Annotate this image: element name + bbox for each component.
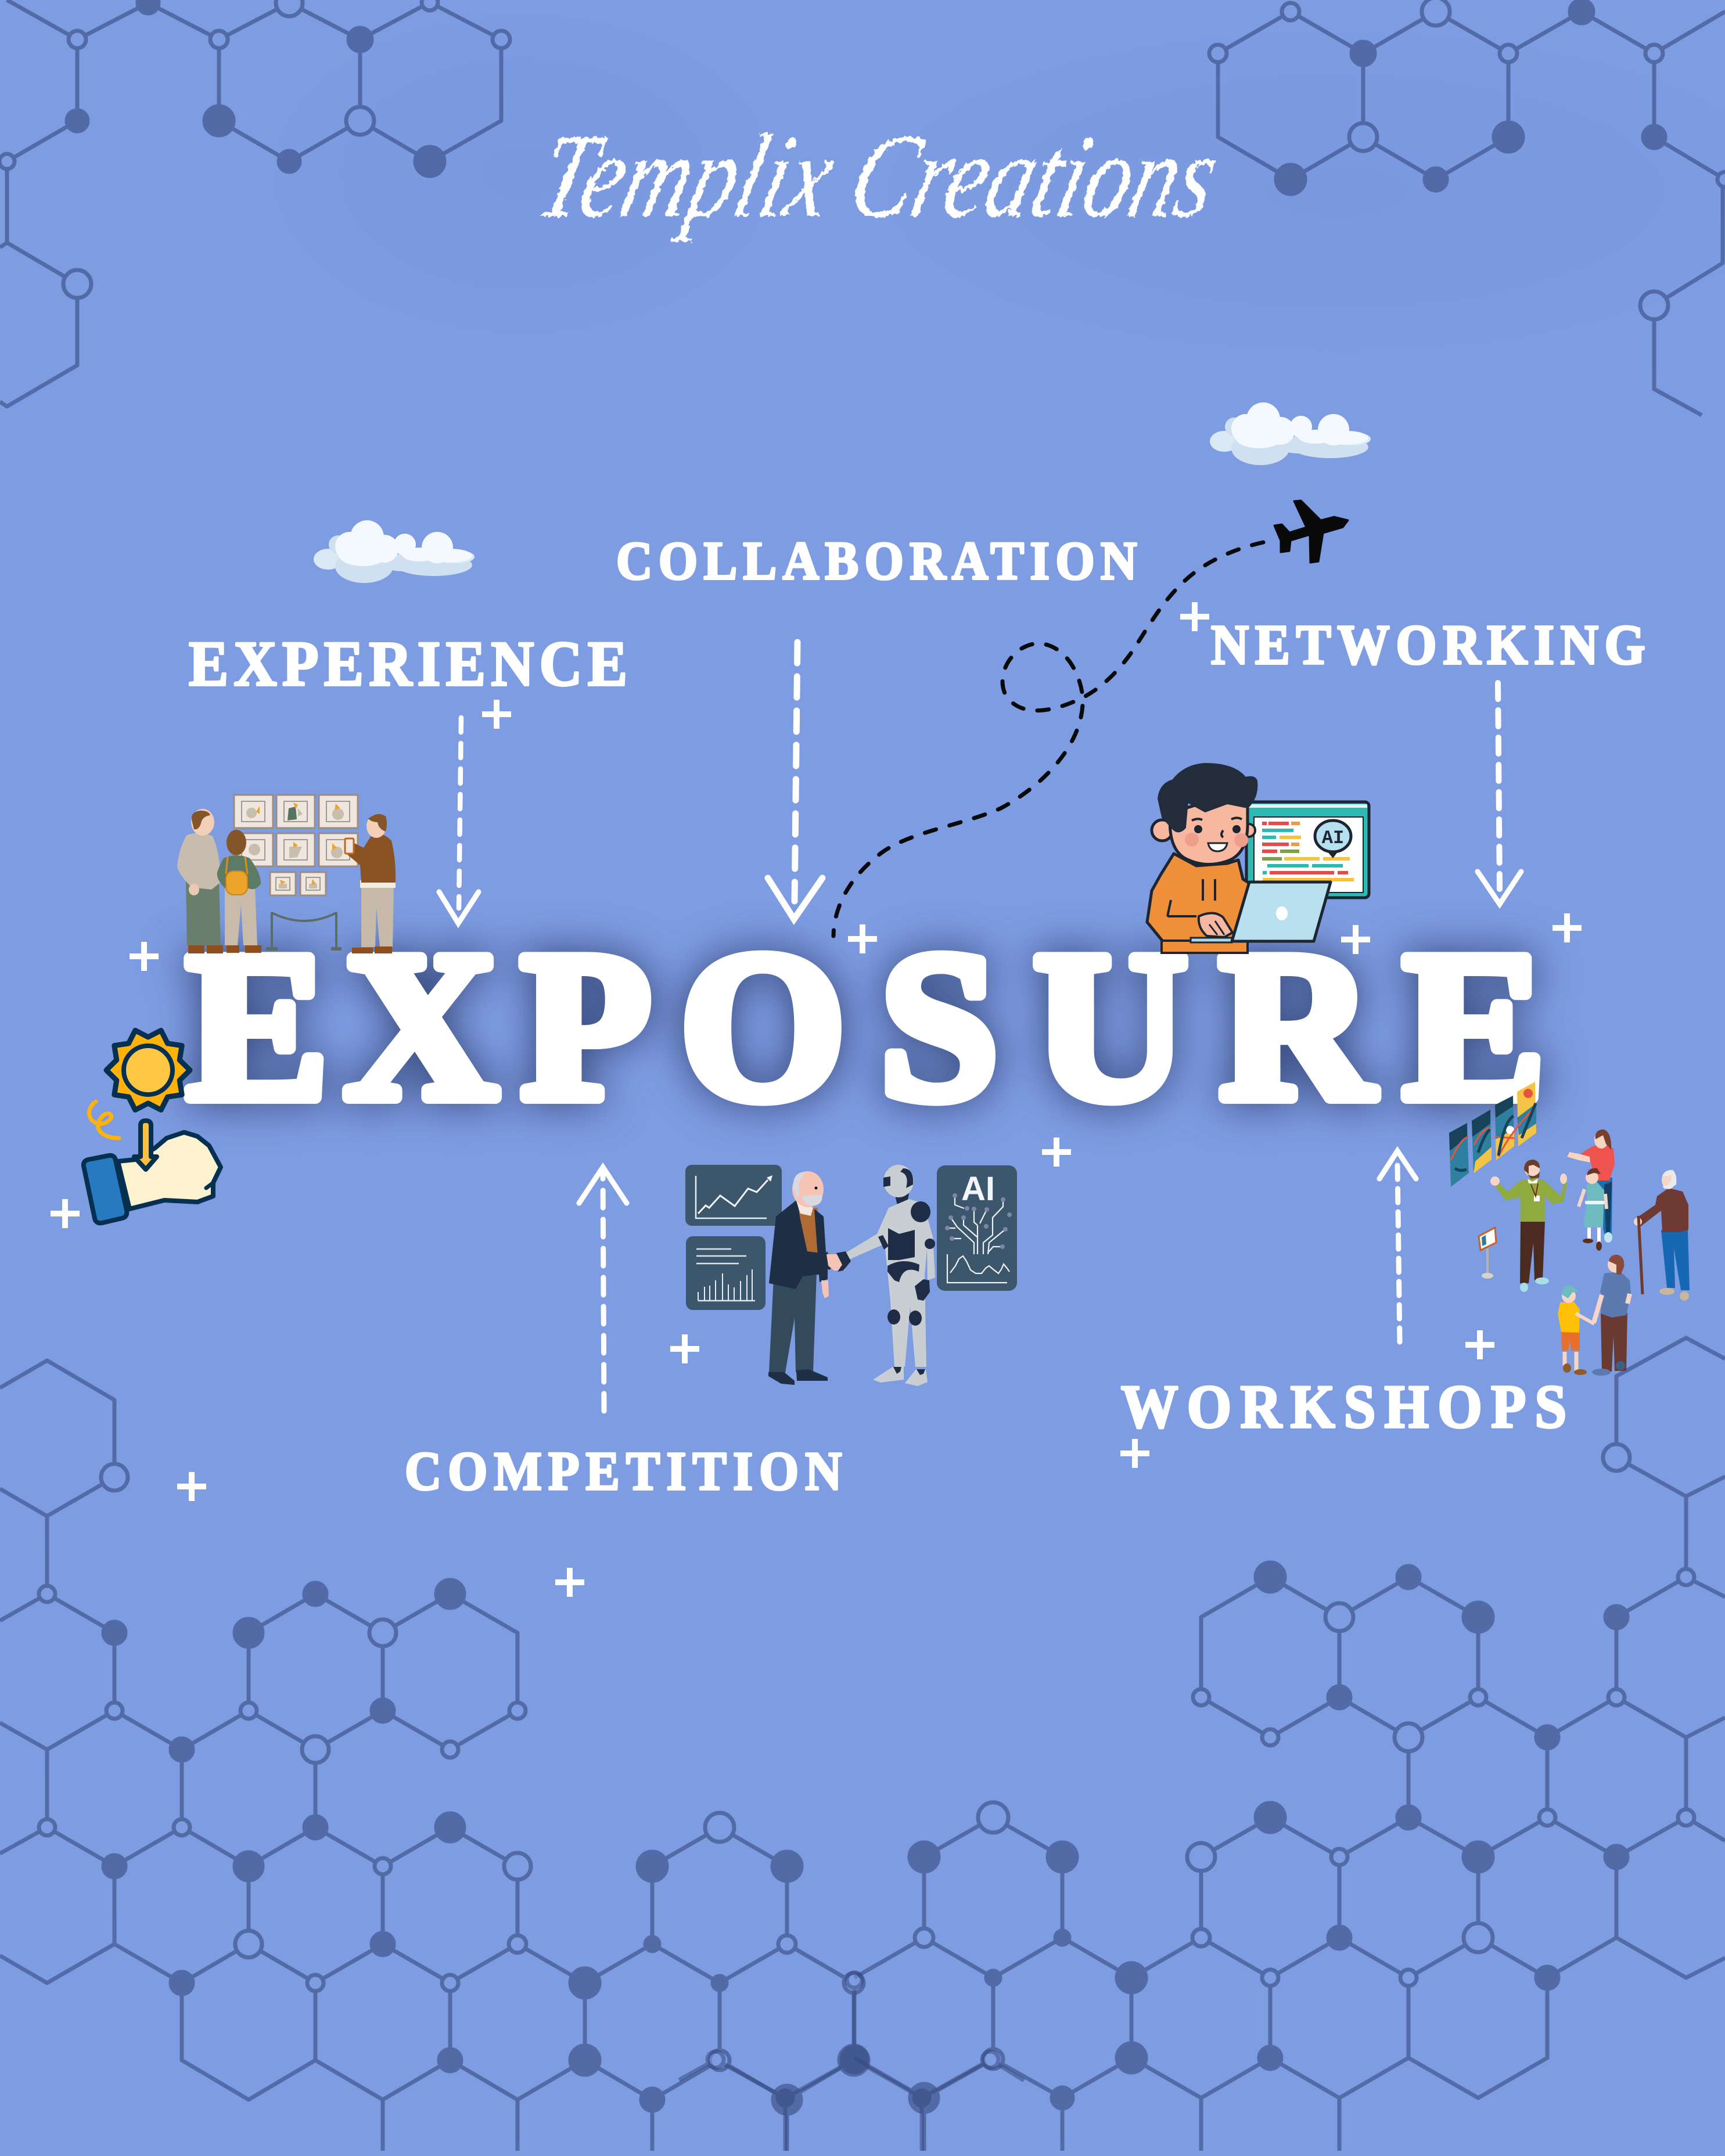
head: [1152, 764, 1256, 865]
icon: sun and hand: [84, 1030, 221, 1223]
label: COMPETITION: COMPETITION: [405, 1441, 842, 1502]
elderly man with cane: [1634, 1170, 1690, 1301]
illustration: man and robot handshake: [685, 1165, 1017, 1386]
guide in green sweater: [1490, 1160, 1567, 1292]
dashed flight path: [833, 542, 1263, 936]
hoodie: [1147, 854, 1249, 941]
orange swirl: [89, 1102, 119, 1138]
illustration: workshop visitors and paintings: [1449, 1082, 1690, 1376]
plus signs: [51, 602, 1582, 1597]
rope barrier: [266, 912, 342, 949]
bar chart panel: [686, 1236, 766, 1310]
label: COLLABORATION: COLLABORATION: [616, 531, 1137, 591]
label: NETWORKING: NETWORKING: [1211, 614, 1645, 676]
icon: cloud left: [314, 520, 475, 583]
AI circuit panel: AI: [961, 1170, 995, 1208]
icon: airplane: [1274, 501, 1348, 563]
laptop: [1191, 882, 1331, 942]
hexagon network: bottom left: [0, 1360, 868, 2151]
heading: EXPOSURE: EXPOSURE: [186, 909, 1545, 1144]
father and boy holding hands: [1558, 1255, 1631, 1376]
sleeve cuff: [84, 1156, 127, 1223]
illustration: gallery visitors: [177, 795, 396, 953]
monitor: [1246, 802, 1369, 898]
visitor right with phone: [345, 814, 396, 953]
AI circuit panel: [937, 1165, 1017, 1291]
arrow: experience: [439, 718, 479, 923]
icon: cloud right: [1210, 402, 1371, 465]
overlapping hexagon layer at bottom centre: [679, 1973, 1024, 2151]
hexagon network: top right: [1209, 0, 1725, 415]
growth chart panel: [685, 1165, 782, 1226]
businessman: [768, 1171, 847, 1385]
AI speech bubble: AI: [1322, 827, 1344, 849]
label: WORKSHOPS: WORKSHOPS: [1121, 1373, 1566, 1441]
visitor with backpack: [217, 830, 261, 953]
girl in teal dress: [1579, 1168, 1607, 1251]
arrow: collaboration: [768, 642, 822, 919]
sun: [106, 1030, 190, 1110]
robot: [836, 1165, 935, 1386]
down arrow: [134, 1121, 157, 1169]
illustration: coder with AI screen: [1147, 764, 1369, 953]
hand: [118, 1132, 221, 1209]
arrow: networking: [1478, 683, 1521, 904]
woman in red top: [1567, 1129, 1615, 1243]
arrow: competition: [579, 1167, 627, 1411]
gallery frames: [234, 795, 358, 895]
sign stand: [1479, 1228, 1496, 1279]
label: EXPERIENCE: EXPERIENCE: [189, 628, 627, 699]
hexagon network: top left: [0, 0, 510, 406]
arrow: workshops: [1379, 1151, 1416, 1342]
paintings: [1449, 1082, 1536, 1187]
visitor left: [177, 809, 223, 953]
hexagon network: bottom right: [854, 1338, 1725, 2151]
title: Templix Creations: Templix Creations: [526, 110, 1232, 243]
AI speech bubble: [1315, 820, 1351, 858]
